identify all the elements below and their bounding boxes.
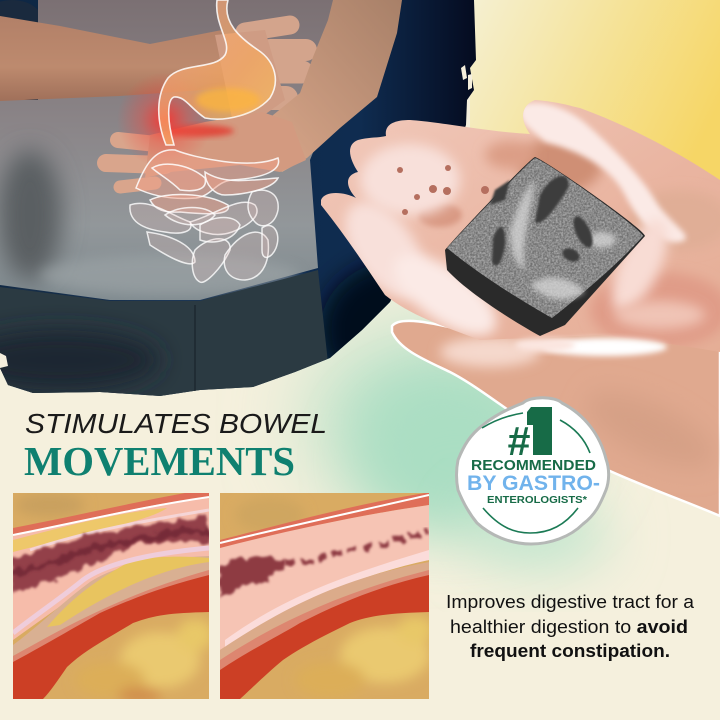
bubbles bbox=[397, 165, 489, 215]
clot bbox=[220, 558, 286, 598]
badge: #1 recommended: RECOMMENDED bbox=[471, 458, 596, 474]
intestines bbox=[136, 150, 279, 214]
panel: artery before bbox=[13, 493, 213, 703]
photo: person holding stomach bbox=[0, 0, 480, 400]
red glow bbox=[122, 80, 208, 159]
title: STIMULATES BOWEL bbox=[25, 408, 327, 439]
body text: Improves digestive tract for a bbox=[446, 591, 695, 612]
badge: #1 recommended: ENTEROLOGISTS* bbox=[487, 494, 588, 506]
body text: frequent constipation. bbox=[470, 640, 670, 661]
photo: hands with lathered charcoal soap bbox=[320, 95, 720, 516]
foam on lower palm bbox=[543, 338, 667, 356]
rough edge specks bbox=[0, 65, 472, 368]
right forearm bbox=[272, 0, 402, 172]
badge: #1 recommended: # bbox=[508, 418, 531, 464]
title bbox=[24, 408, 327, 484]
artery wall and lumen bbox=[13, 493, 209, 534]
pants bbox=[0, 270, 332, 400]
badge: #1 recommended: BY GASTRO- bbox=[467, 472, 600, 495]
shirt bbox=[0, 0, 345, 300]
left forearm bbox=[0, 16, 240, 101]
layers below lumen bbox=[13, 556, 209, 664]
clot bbox=[13, 517, 209, 593]
body text: healthier digestion to avoid bbox=[450, 616, 688, 637]
body text bbox=[446, 591, 695, 661]
title: MOVEMENTS bbox=[24, 438, 295, 484]
upper hand with fingers bbox=[245, 25, 306, 98]
stomach bbox=[159, 0, 275, 145]
panel: artery after bbox=[220, 493, 433, 699]
charcoal soap bar bbox=[445, 157, 645, 336]
badge: #1 recommended bbox=[456, 398, 609, 544]
foam bbox=[329, 103, 705, 351]
lower hand bbox=[392, 321, 720, 516]
upper hand bbox=[320, 95, 720, 355]
lower hand bbox=[106, 140, 175, 187]
